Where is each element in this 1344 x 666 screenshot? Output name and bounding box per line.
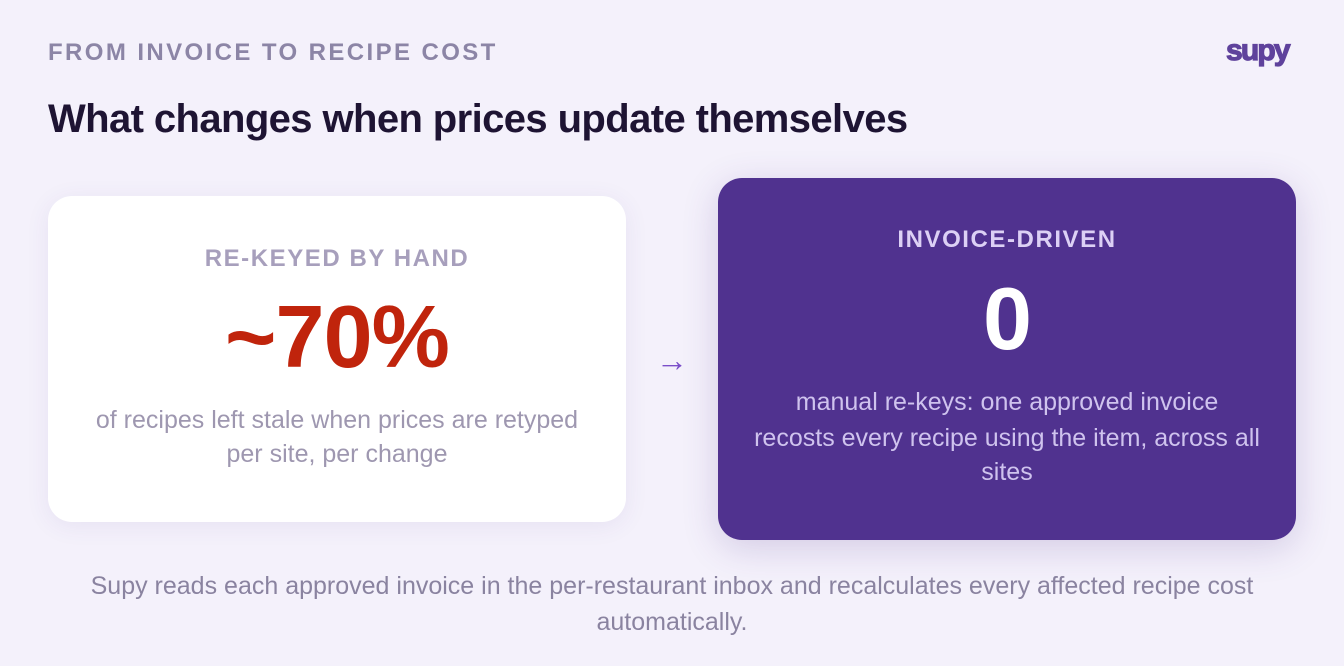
footer note: automatically. (596, 608, 748, 636)
footer note: Supy reads each approved invoice in the per-restaurant inbox and recalculates every affected recipe cost (91, 572, 1253, 600)
logo: supy: supy (1226, 34, 1289, 67)
stat: 0: 0 (983, 269, 1031, 368)
panel label: invoice-driven: INVOICE-DRIVEN (897, 226, 1117, 253)
arrow: → (656, 342, 688, 378)
panel label: re-keyed: RE-KEYED BY HAND (205, 245, 469, 272)
description: manual re-keys: sites (981, 458, 1033, 486)
footer note (91, 572, 1254, 636)
description: manual re-keys: recosts every recipe using the item, across all (754, 424, 1260, 452)
panel: invoice-driven (718, 178, 1296, 540)
title: What changes when prices update themselves (48, 97, 908, 141)
description: stale recipes (96, 406, 578, 468)
eyebrow heading: FROM INVOICE TO RECIPE COST (48, 39, 498, 66)
stat: ~70%: ~70% (225, 287, 449, 386)
description: manual re-keys: manual re-keys: one approved invoice (796, 388, 1218, 416)
panel: re-keyed by hand (48, 196, 626, 522)
description: manual re-keys (754, 388, 1260, 486)
description: stale recipes: of recipes left stale when prices are retyped (96, 406, 578, 434)
description: stale recipes: per site, per change (226, 440, 447, 468)
